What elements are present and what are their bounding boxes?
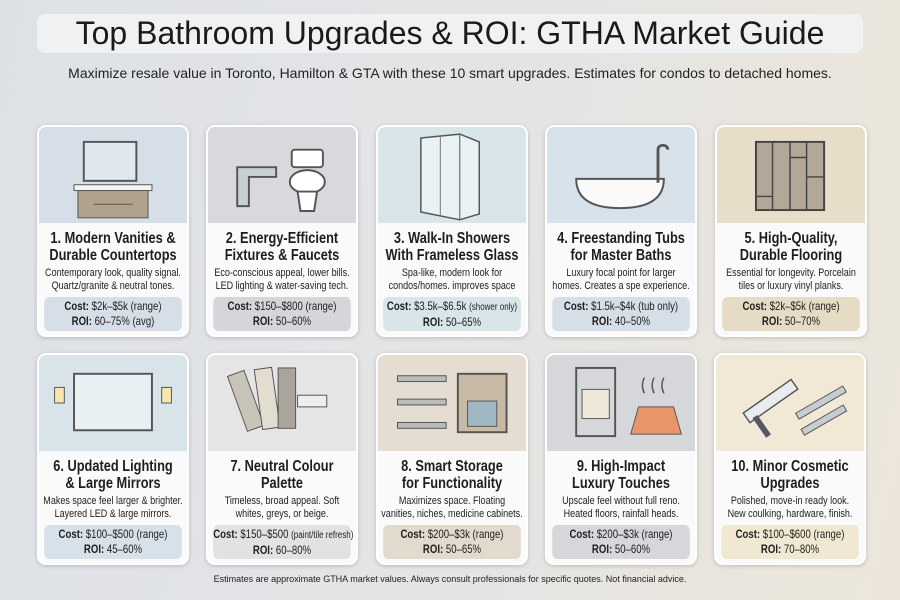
heading: Palette (261, 475, 303, 492)
heading (53, 458, 173, 492)
cost box (213, 297, 351, 331)
icon: vanity (39, 127, 187, 223)
cost box: ROI: 50–60% (253, 314, 311, 328)
cost box: Cost: $200–$3k (range) (400, 527, 504, 541)
cost box (44, 525, 182, 559)
heading: Durable Countertops (49, 247, 177, 264)
heading: & Large Mirrors (65, 475, 161, 492)
cost box (721, 525, 859, 559)
icon: bathtub (547, 127, 695, 223)
cost box: Cost: $2k–$5k (range) (64, 299, 162, 313)
cost box: ROI: 60–80% (253, 543, 311, 557)
cost box: ROI: 70–80% (761, 542, 819, 556)
cost box: Cost: $100–$500 (range) (59, 527, 167, 541)
text: Polished, move-in ready look. (731, 495, 849, 507)
text: Maximizes space. Floating (399, 495, 505, 507)
text (562, 495, 680, 520)
text (389, 267, 515, 292)
cost box: ROI: 50–65% (423, 315, 481, 329)
panel: card 9 luxury (545, 353, 697, 565)
heading: 4. Freestanding Tubs (557, 230, 685, 247)
heading: 2. Energy-Efficient (226, 230, 338, 247)
heading: 7. Neutral Colour (230, 458, 334, 475)
heading: Fixtures & Faucets (225, 247, 339, 264)
text: tiles or luxury vinyl planks. (739, 280, 843, 292)
icon: mirror with lights (39, 355, 187, 451)
heading: for Functionality (402, 475, 502, 492)
cost box: Cost: $2k–$5k (range) (742, 299, 840, 313)
cost box: Cost: $1.5k–$4k (tub only) (564, 299, 678, 313)
heading (740, 230, 842, 264)
heading (49, 230, 177, 264)
icon: swatches and roller (208, 355, 356, 451)
cost box: ROI: 60–75% (avg) (72, 314, 154, 328)
heading: 3. Walk-In Showers (394, 230, 510, 247)
text: Layered LED & large mirrors. (55, 508, 171, 520)
text: Makes space feel larger & brighter. (43, 495, 183, 507)
heading (225, 230, 339, 264)
cost box: Cost: $150–$800 (range) (228, 299, 336, 313)
text (552, 267, 690, 292)
panel: card 6 lighting (37, 353, 189, 565)
text (214, 267, 350, 292)
heading (557, 230, 685, 264)
heading: for Master Baths (570, 247, 672, 264)
heading (230, 458, 334, 492)
text: Quartz/granite & neutral tones. (52, 280, 174, 292)
icon: floor planks (717, 127, 865, 223)
heading (401, 458, 503, 492)
panel: card 5 flooring (715, 125, 867, 337)
cost box: ROI: 45–60% (84, 542, 142, 556)
icon: towel warmer and heated floor (547, 355, 695, 451)
text (726, 267, 856, 292)
text (381, 495, 523, 520)
text: condos/homes. improves space (389, 280, 515, 292)
cost box: Cost: $100–$600 (range) (736, 527, 844, 541)
text: Timeless, broad appeal. Soft (225, 495, 339, 507)
text: Spa-like, modern look for (402, 267, 502, 279)
text: vanities, niches, medicine cabinets. (381, 508, 523, 520)
panel: card 3 showers (376, 125, 528, 337)
text: Luxury focal point for larger (566, 267, 676, 279)
text: homes. Creates a spe experience. (552, 280, 690, 292)
heading: 6. Updated Lighting (53, 458, 173, 475)
text (224, 495, 340, 520)
text: whites, greys, or beige. (236, 508, 328, 520)
cost box: ROI: 50–65% (423, 542, 481, 556)
text: Eco-conscious appeal, lower bills. (214, 267, 350, 279)
cost box: ROI: 50–70% (762, 314, 820, 328)
text: Contemporary look, quality signal. (45, 267, 181, 279)
text: Essential for longevity. Porcelain (726, 267, 856, 279)
cost box (383, 297, 521, 331)
cost box (722, 297, 860, 331)
heading: 5. High-Quality, (745, 230, 837, 247)
title: Top Bathroom Upgrades & ROI: GTHA Market Guide (76, 15, 824, 51)
heading (386, 230, 518, 264)
cost box: Cost: $200–$3k (range) (570, 527, 672, 541)
heading (572, 458, 670, 492)
cost box: ROI: 40–50% (592, 314, 650, 328)
heading: 10. Minor Cosmetic (731, 458, 849, 475)
icon: shelves and niche (378, 355, 526, 451)
heading: Durable Flooring (740, 247, 842, 264)
text (45, 267, 181, 292)
panel: card 4 tubs (545, 125, 697, 337)
icon: faucet and toilet (208, 127, 356, 223)
text (728, 495, 852, 520)
cost box: Cost: $150–$500 (paint/tile refresh) (213, 527, 353, 541)
subtitle: Maximize resale value in Toronto, Hamilton & GTA with these 10 smart upgrades. Estimates for condos to detached homes. (68, 65, 832, 81)
panel: card 2 fixtures (206, 125, 358, 337)
text: New coulking, hardware, finish. (728, 508, 852, 520)
heading: Upgrades (760, 475, 820, 492)
cost box: Cost: $3.5k–$6.5k (shower only) (387, 299, 517, 313)
text: Heated floors, rainfall heads. (564, 508, 678, 520)
cost box (383, 525, 521, 559)
cost box (44, 297, 182, 331)
panel: card 7 colour palette (206, 353, 358, 565)
panel: card 8 storage (376, 353, 528, 565)
cost box (213, 525, 351, 559)
cost box (552, 525, 690, 559)
cost box: ROI: 50–60% (592, 542, 650, 556)
icon: shower (378, 127, 526, 223)
icon: caulk gun and handles (716, 355, 864, 451)
footer note: Estimates are approximate GTHA market values. Always consult professionals for specific quotes. Not financial advice. (214, 574, 686, 584)
panel: card 1 vanities (37, 125, 189, 337)
panel: card 10 cosmetic (714, 353, 866, 565)
cost box (552, 297, 690, 331)
heading: 1. Modern Vanities & (50, 230, 176, 247)
heading: 8. Smart Storage (401, 458, 503, 475)
heading (731, 458, 849, 492)
text: LED lighting & water-saving tech. (216, 280, 348, 292)
text: Upscale feel without full reno. (562, 495, 680, 507)
text (43, 495, 183, 520)
heading: With Frameless Glass (386, 247, 518, 264)
heading: Luxury Touches (572, 475, 670, 492)
heading: 9. High-Impact (577, 458, 665, 475)
